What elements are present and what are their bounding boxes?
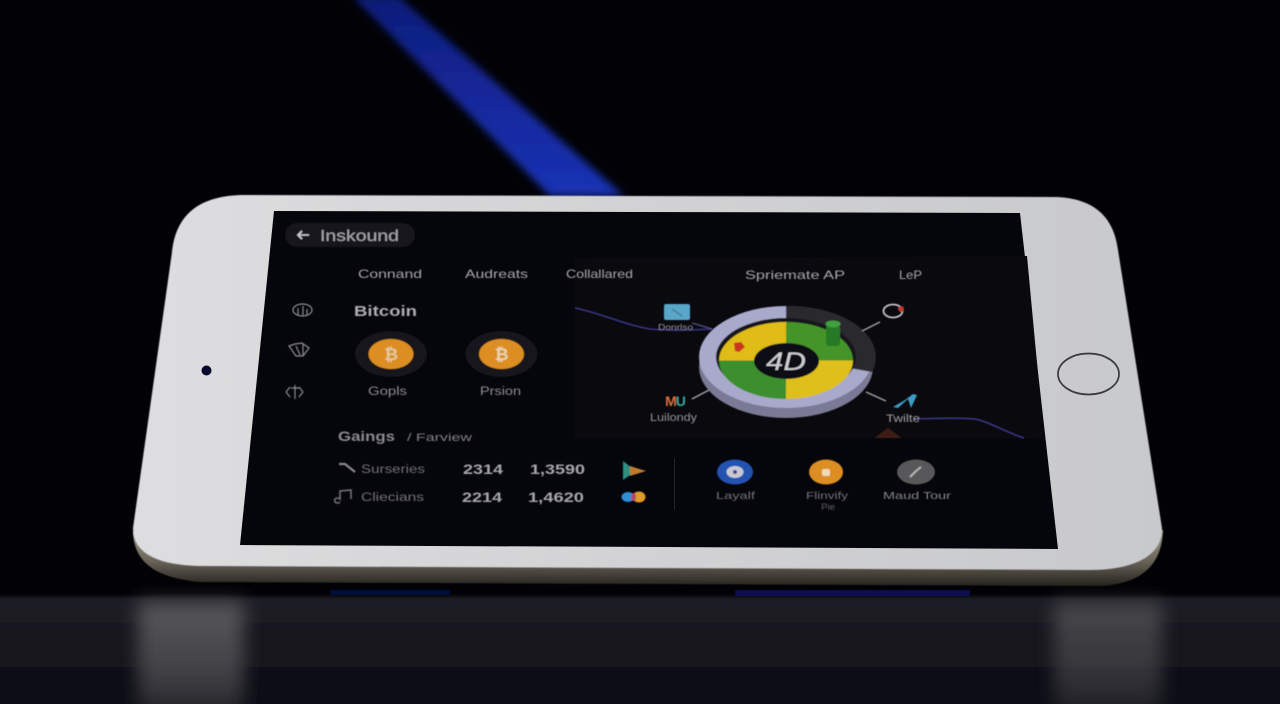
stats row: Surseries: 1,3590 bbox=[530, 461, 585, 477]
screen bbox=[240, 211, 1058, 549]
green peg bbox=[826, 320, 840, 346]
top navigation tabs: LeP bbox=[899, 268, 922, 282]
top navigation tabs: Spriemate AP bbox=[745, 268, 845, 282]
home button bbox=[1058, 354, 1119, 394]
bitcoin tile: Gopls: ₿ bbox=[384, 345, 398, 364]
back pill heading bbox=[285, 223, 415, 247]
callout: Donrlso bbox=[658, 304, 693, 332]
centre hub value bbox=[754, 343, 819, 379]
stats divider bbox=[674, 458, 675, 510]
front camera bbox=[202, 366, 212, 376]
radial 4D gauge bbox=[699, 306, 876, 418]
table surface with reflections bbox=[0, 590, 1280, 704]
callout: Luilondy bbox=[650, 393, 698, 424]
icon: overlapping dots bbox=[622, 492, 646, 502]
app: Layalf bbox=[716, 460, 755, 502]
back pill heading: Inskound bbox=[320, 228, 399, 245]
top navigation tabs: Connand bbox=[358, 267, 422, 281]
callout: Luilondy: MU bbox=[665, 393, 686, 409]
app: Maud Tour: Maud Tour bbox=[883, 490, 952, 502]
phone front face bbox=[133, 195, 1162, 570]
callout: Twille bbox=[886, 394, 920, 425]
bitcoin tile: Gopls: Gopls bbox=[368, 386, 407, 398]
phone side edge bbox=[133, 530, 1163, 586]
top navigation tabs: Collallared bbox=[566, 267, 633, 281]
top navigation tabs: Audreats bbox=[465, 267, 528, 281]
gauge base extrusion bbox=[699, 316, 873, 418]
phone body bbox=[133, 195, 1163, 586]
stats row: Cliecians: 1,4620 bbox=[528, 489, 584, 505]
callout: Twille: Twilte bbox=[886, 413, 920, 425]
top navigation tabs bbox=[358, 267, 922, 282]
callout: top-right icon bbox=[884, 304, 904, 318]
stats heading: / Farview bbox=[407, 432, 472, 444]
bitcoin tile: Prsion: Prsion bbox=[480, 386, 521, 398]
callout: Luilondy: Luilondy bbox=[650, 412, 698, 424]
app: Flinvity Pie: Pie bbox=[821, 502, 835, 513]
gauge ring bbox=[699, 306, 873, 408]
app: Flinvity Pie bbox=[806, 460, 849, 513]
radial 4D gauge: 4D bbox=[766, 348, 806, 376]
bitcoin tile: Prsion: ₿ bbox=[495, 345, 509, 364]
bitcoin tile: Prsion bbox=[466, 331, 538, 398]
section heading: Bitcoin: Bitcoin bbox=[354, 303, 417, 320]
blue light beam bbox=[352, 0, 624, 196]
app: Layalf: Layalf bbox=[716, 490, 755, 502]
gauge quarters bbox=[719, 322, 786, 360]
callout: Donrlso: Donrlso bbox=[658, 322, 693, 332]
stats row: Surseries bbox=[339, 461, 585, 477]
chart panel background bbox=[575, 256, 1044, 438]
stats row: Cliecians: Cliecians bbox=[361, 492, 424, 504]
bitcoin tile: Gopls bbox=[355, 331, 427, 398]
stats heading: Gaings bbox=[338, 429, 395, 444]
stats row: Cliecians bbox=[335, 489, 584, 505]
stats heading bbox=[338, 429, 472, 444]
app: Flinvity Pie: Flinvify bbox=[806, 490, 849, 502]
stats row: Surseries: 2314 bbox=[463, 461, 503, 477]
icon: play store bbox=[623, 461, 646, 480]
side icons bbox=[286, 304, 312, 399]
stats row: Cliecians: 2214 bbox=[462, 489, 502, 505]
red triangle marker bbox=[874, 428, 902, 438]
connector spokes bbox=[692, 322, 886, 401]
red marker bbox=[734, 342, 745, 352]
app: Maud Tour bbox=[883, 460, 952, 502]
purple trend lines bbox=[575, 308, 1024, 438]
stats row: Surseries: Surseries bbox=[361, 464, 425, 476]
